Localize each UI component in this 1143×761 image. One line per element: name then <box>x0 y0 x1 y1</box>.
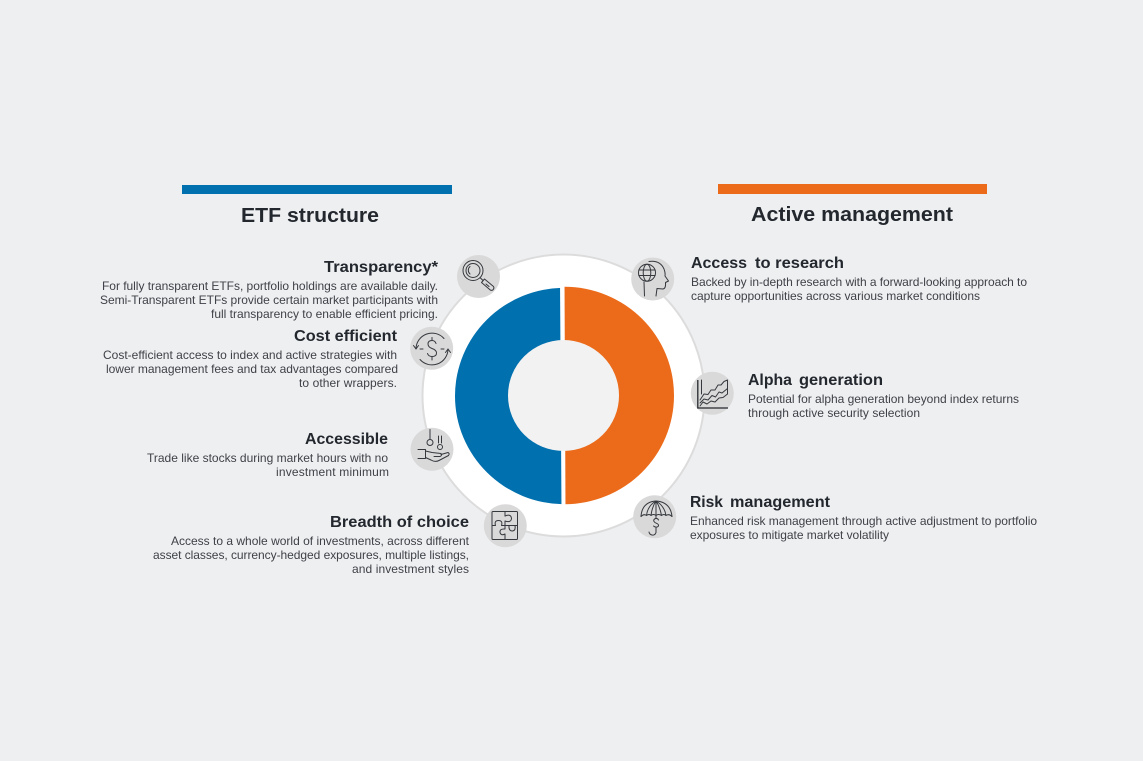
text block: Alpha generation <box>748 372 1019 420</box>
panel: ETF structure header <box>182 185 452 227</box>
text block: Transparency <box>100 259 439 321</box>
item description: and investment styles <box>352 562 469 576</box>
item heading: Breadth of choice <box>330 514 469 531</box>
item heading: Accessible <box>305 431 388 448</box>
outer white ring <box>422 254 704 536</box>
item description: Backed by in-depth research with a forward-looking approach to <box>691 275 1027 289</box>
icon: hand with falling coins <box>410 428 454 471</box>
item description: through active security selection <box>748 406 920 420</box>
icon: head with globe <box>631 258 674 300</box>
item description: capture opportunities across various market conditions <box>691 289 980 303</box>
item description: Potential for alpha generation beyond index returns <box>748 392 1019 406</box>
item description <box>690 514 1037 542</box>
item description: to other wrappers. <box>299 376 397 390</box>
icon: dollar with circular arrows <box>410 327 453 370</box>
item heading: generation <box>799 372 883 389</box>
item heading: Risk <box>690 494 723 511</box>
icon: umbrella with dollar <box>633 495 676 538</box>
item description <box>748 392 1019 420</box>
text block: Breadth of choice <box>153 514 470 576</box>
donut chart with outer ring <box>422 254 704 536</box>
item description <box>100 279 438 321</box>
item description: asset classes, currency-hedged exposures, multiple listings, <box>153 548 469 562</box>
icon: magnifying glass <box>457 255 500 298</box>
text block: Cost efficient <box>103 328 398 390</box>
text block: Access to research <box>691 255 1027 303</box>
blue header bar <box>182 185 452 194</box>
centre hole <box>508 340 619 451</box>
item description: Enhanced risk management through active adjustment to portfolio <box>690 514 1037 528</box>
item heading: Cost efficient <box>294 328 398 345</box>
item description <box>147 451 389 479</box>
text block: Risk management <box>690 494 1037 542</box>
heading: Active management: Active management <box>751 204 953 226</box>
item description: Cost-efficient access to index and active strategies with <box>103 348 397 362</box>
heading: ETF structure: ETF structure <box>241 205 379 227</box>
item description: Semi-Transparent ETFs provide certain market participants with <box>100 293 438 307</box>
item heading: Transparency* <box>324 259 439 276</box>
item description: exposures to mitigate market volatility <box>690 528 889 542</box>
orange half: Active management <box>564 286 674 504</box>
item heading: Alpha <box>748 372 792 389</box>
blue half: ETF structure <box>455 288 562 504</box>
panel: Active management header <box>718 184 987 226</box>
item heading: to research <box>755 255 844 272</box>
orange header bar <box>718 184 987 194</box>
item description <box>103 348 398 390</box>
item description <box>691 275 1027 303</box>
item heading: Access <box>691 255 747 272</box>
item heading <box>691 255 844 272</box>
item description: Trade like stocks during market hours with no <box>147 451 388 465</box>
item heading <box>748 372 883 389</box>
text block: Accessible <box>147 431 389 479</box>
item heading: management <box>730 494 831 511</box>
icon: rising line chart <box>691 372 734 415</box>
item description: full transparency to enable efficient pricing. <box>211 307 438 321</box>
item description: Access to a whole world of investments, across different <box>171 534 470 548</box>
icon: puzzle pieces <box>484 504 527 547</box>
item description: lower management fees and tax advantages compared <box>106 362 398 376</box>
item description: investment minimum <box>276 465 389 479</box>
item description <box>153 534 470 576</box>
item description: For fully transparent ETFs, portfolio holdings are available daily. <box>102 279 438 293</box>
